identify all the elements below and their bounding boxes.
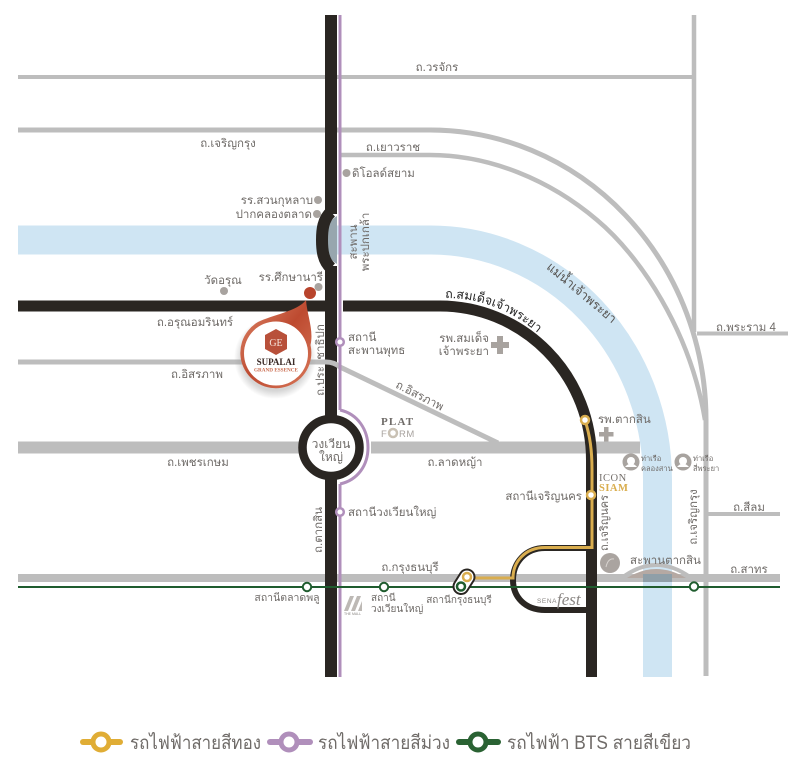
purple line — [340, 15, 368, 677]
landmark: SENA fest — [537, 590, 582, 609]
Wongwian Yai roundabout: ใหญ่ — [319, 450, 343, 464]
station labels: สะพานพุทธ — [348, 345, 405, 357]
pier: Khlong San: ท่าเรือ — [641, 454, 661, 463]
road labels: ถ.ลาดหญ้า — [428, 456, 482, 469]
station labels: วงเวียนใหญ่ — [371, 603, 423, 615]
pier: Khlong San — [622, 454, 673, 473]
landmark: SENA fest: SENA — [537, 598, 557, 605]
landmark: PLATFORM: RM — [399, 429, 415, 440]
road labels — [157, 62, 777, 576]
road labels: ชาธิปก — [314, 324, 327, 360]
landmark: PLATFORM: F — [381, 429, 388, 440]
river: Chao Phraya — [18, 240, 658, 677]
place labels: ปากคลองตลาด — [236, 209, 312, 221]
Taksin bridge arch — [623, 565, 690, 582]
station labels — [254, 331, 582, 615]
landmark: SENA fest: fest — [557, 590, 582, 609]
road labels: ถ.กรุงธนบุรี — [381, 561, 439, 574]
road labels: ถ.เยาวราช — [366, 142, 420, 154]
road labels: ถ.ประ — [315, 366, 327, 396]
place labels: พระปกเกล้า — [359, 213, 372, 271]
landmark: ICONSIAM — [599, 473, 628, 494]
road labels: ถ.สมเด็จเจ้าพระยา — [446, 291, 540, 332]
Wongwian Yai roundabout: วงเวียน — [312, 437, 350, 451]
location pin: Supalai Grand Essence — [234, 287, 316, 399]
landmark: PLATFORM: PLAT — [381, 416, 414, 428]
legend — [83, 732, 691, 754]
landmark: The Mall: THE MALL — [344, 612, 361, 616]
road labels: ถ.พระราม 4 — [716, 322, 777, 334]
location pin: Supalai Grand Essence: GRAND ESSENCE — [254, 368, 299, 374]
place labels: รร.สวนกุหลาบ — [241, 195, 313, 207]
landmark: ICONSIAM: ICON — [599, 473, 627, 484]
station labels: สถานีกรุงธนบุรี — [426, 594, 492, 606]
station labels: สถานีวงเวียนใหญ่ — [348, 506, 437, 519]
legend: purple line — [270, 732, 450, 754]
road labels: ถ.สีลม — [733, 501, 765, 514]
main black roads — [18, 15, 592, 677]
gold line — [470, 420, 592, 578]
pier: Si Phraya: ท่าเรือ — [693, 454, 713, 463]
station labels: สถานี — [348, 331, 376, 344]
gold stations — [581, 416, 595, 499]
legend: gold line — [83, 732, 261, 754]
landmark: The Mall — [344, 596, 362, 616]
legend: green line: รถไฟฟ้า BTS สายสีเขียว — [507, 732, 691, 754]
place labels: ดิโอลด์สยาม — [352, 166, 415, 180]
road labels: ถ.อิสรภาพ — [171, 368, 223, 381]
logo shield: GE — [269, 338, 283, 349]
landmark: Vasu circle — [600, 553, 620, 573]
road labels: ถ.เพชรเกษม — [167, 457, 229, 469]
green BTS line — [18, 586, 780, 588]
road labels: ถ.เจริญกรุง — [687, 489, 700, 545]
road labels: ถ.ตากสิน — [312, 507, 325, 553]
station labels: สถานี — [371, 592, 396, 604]
road labels: ถ.อรุณอมรินทร์ — [157, 315, 233, 329]
location pin: Supalai Grand Essence: SUPALAI — [257, 357, 296, 367]
pier: Khlong San: คลองสาน — [641, 464, 673, 473]
place labels: สะพานตากสิน — [630, 554, 701, 567]
Wongwian Yai roundabout — [302, 419, 360, 476]
place labels: สะพาน — [348, 224, 360, 260]
place labels: เจ้าพระยา — [439, 345, 489, 358]
road labels: ถ.วรจักร — [416, 62, 458, 74]
road labels: แม่น้ำเจ้าพระยา — [544, 257, 621, 326]
road labels: ถ.เจริญนคร — [599, 495, 611, 551]
landmark: PLATFORM — [381, 416, 415, 440]
landmark: ICONSIAM: SIAM — [599, 483, 628, 494]
purple stations — [336, 338, 344, 516]
grey road crossing Prachathipok — [318, 362, 340, 367]
place labels: รพ.สมเด็จ — [439, 330, 489, 345]
station labels: สถานีเจริญนคร — [505, 490, 582, 503]
Phra Pok Klao bridge bypass — [322, 212, 337, 268]
station labels: สถานีตลาดพลู — [254, 591, 320, 604]
legend: gold line: รถไฟฟ้าสายสีทอง — [130, 732, 261, 754]
place labels — [204, 166, 701, 567]
place labels: รพ.ตากสิน — [598, 413, 651, 426]
pier: Si Phraya: สี่พระยา — [693, 463, 719, 473]
green stations — [303, 582, 698, 591]
Krung Thon Buri interchange — [457, 573, 471, 590]
road labels: ถ.สาทร — [730, 564, 768, 576]
pier: Si Phraya — [674, 454, 719, 473]
road labels: ถ.อิสรภาพ — [394, 378, 446, 413]
legend: purple line: รถไฟฟ้าสายสีม่วง — [318, 732, 450, 754]
place markers — [220, 169, 614, 442]
place labels: รร.ศึกษานารี — [259, 271, 323, 284]
road labels: ถ.เจริญกรุง — [200, 137, 256, 150]
place labels: วัดอรุณ — [204, 275, 242, 287]
